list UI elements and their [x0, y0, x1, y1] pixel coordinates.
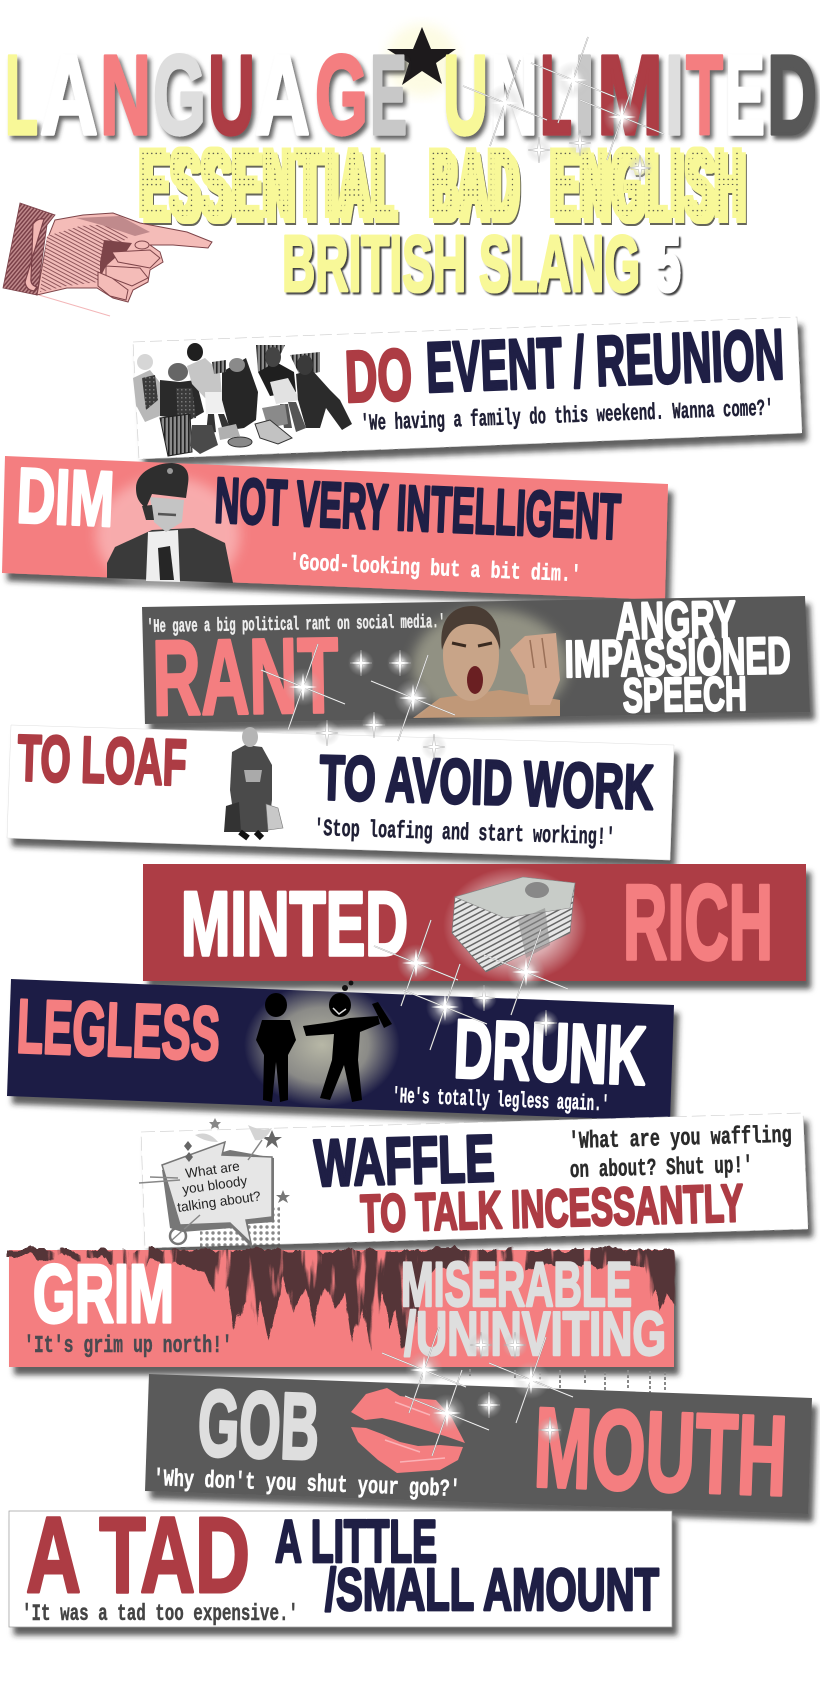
headword: gob: GOB	[196, 1370, 321, 1479]
title: Language Unlimited: I	[574, 32, 595, 158]
headword: waffle: WAFFLE	[313, 1121, 495, 1200]
meaning: drunk: DRUNK	[452, 1002, 648, 1103]
title: Language Unlimited: T	[686, 32, 723, 158]
title: Language Unlimited: U	[443, 32, 488, 158]
title: Language Unlimited: A	[40, 32, 98, 158]
photo: family on deck chairs	[133, 343, 352, 456]
photo: officer	[96, 463, 240, 593]
headword: minted: MINTED	[181, 874, 408, 975]
headword: dim: DIM	[15, 451, 116, 543]
title: Language Unlimited: G	[153, 32, 206, 158]
example quote: 'He's totally legless again.'	[392, 1084, 610, 1118]
meaning: a little / small amount: A LITTLE	[275, 1508, 437, 1575]
headword: do: DO	[344, 335, 414, 418]
panel: grim	[9, 1247, 674, 1398]
panel: legless	[7, 979, 674, 1121]
sparkles: title	[463, 37, 664, 181]
title: Language Unlimited	[5, 32, 817, 158]
meaning: miserable / uninviting: /UNINVITING	[404, 1300, 666, 1369]
subtitle: Essential Bad English: ESSENTIAL	[139, 130, 397, 235]
icon: speech bubble: What are	[184, 1158, 241, 1181]
headword: a tad: A TAD	[26, 1494, 250, 1615]
meaning: angry impassioned speech	[564, 591, 791, 723]
title: Language Unlimited: A	[255, 32, 310, 158]
panel: waffle	[139, 1113, 808, 1248]
icon: speech bubble: talking about?	[176, 1188, 262, 1215]
title: Language Unlimited: N	[100, 32, 151, 158]
photo: old woman with bags	[224, 727, 283, 838]
icon: pointing hand	[3, 203, 212, 316]
panel: rant	[142, 591, 810, 738]
title: Language Unlimited: I	[665, 32, 684, 158]
title: Language Unlimited: E	[370, 32, 407, 158]
photo: shouting man	[412, 606, 568, 721]
panel: do	[133, 316, 802, 459]
example quote: 'He gave a big political rant on social media.'	[147, 611, 445, 638]
example quote: 'It was a tad too expensive.'	[22, 1601, 298, 1627]
title: Language Unlimited: U	[208, 32, 255, 158]
sparkles: grim and gob	[382, 1327, 573, 1456]
icon: star with glow	[386, 24, 458, 96]
panel: a tad	[9, 1494, 672, 1627]
title: Language Unlimited: G	[315, 32, 368, 158]
meaning: miserable / uninviting: MISERABLE	[401, 1250, 632, 1320]
meaning: angry impassioned speech: ANGRY	[615, 591, 736, 651]
example quote: 'Stop loafing and start working!'	[314, 816, 615, 852]
example quote: 'Good-looking but a bit dim.'	[289, 550, 582, 588]
headword: rant: RANT	[151, 615, 339, 738]
title: Language Unlimited: N	[490, 32, 538, 158]
meaning: miserable / uninviting	[401, 1250, 666, 1369]
example quote: 'It's grim up north!'	[24, 1333, 232, 1360]
panel: to loaf	[7, 721, 674, 860]
title: Language Unlimited: E	[725, 32, 765, 158]
meaning: angry impassioned speech: SPEECH	[622, 668, 747, 723]
title: Language Unlimited: M	[597, 32, 663, 158]
meaning: to avoid work: TO AVOID WORK	[319, 743, 655, 823]
icon: lips	[351, 1388, 465, 1473]
panel: minted	[143, 862, 806, 983]
title: Language Unlimited: L	[5, 32, 38, 158]
meaning: a little / small amount: /SMALL AMOUNT	[325, 1557, 659, 1623]
heading: British Slang 5: 5	[655, 219, 681, 308]
icon: speech bubble	[139, 1118, 290, 1248]
panel: gob	[145, 1370, 812, 1519]
headword: legless: LEGLESS	[15, 984, 222, 1077]
photo: stack of banknotes	[443, 867, 587, 983]
headword: to loaf: TO LOAF	[17, 721, 188, 799]
texture: grunge flecks below panel	[470, 1369, 665, 1398]
example quote: 'Why don't you shut your gob?'	[153, 1466, 460, 1504]
example quote	[568, 1123, 792, 1185]
sparkles: minted and legless	[374, 920, 568, 1050]
title: Language Unlimited: L	[540, 32, 572, 158]
texture: rust drips	[9, 1250, 674, 1352]
icon: speech bubble: you bloody	[181, 1173, 248, 1197]
panel: dim	[2, 451, 668, 600]
icon: sober and drunk figures	[244, 981, 400, 1107]
subtitle: Essential Bad English: BAD	[429, 130, 519, 235]
headword: grim: GRIM	[33, 1247, 174, 1340]
meaning: a little / small amount	[275, 1508, 659, 1623]
sparkles: rant and loaf	[261, 644, 455, 760]
